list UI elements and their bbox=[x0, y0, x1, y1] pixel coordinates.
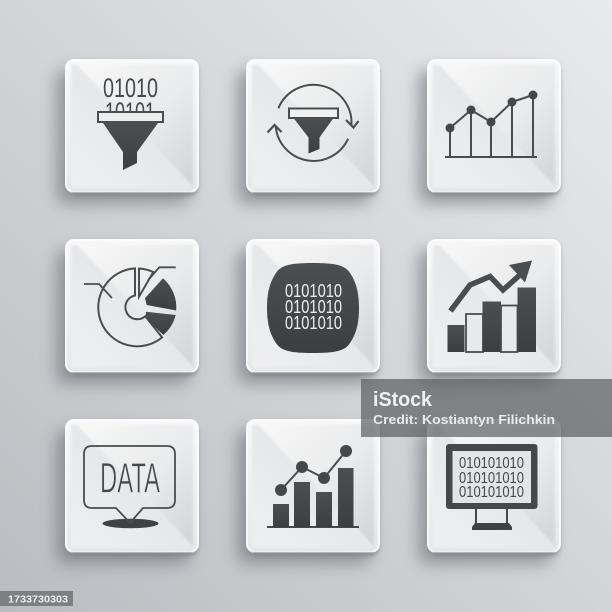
image id tag: 1733730303 bbox=[8, 594, 68, 606]
icon: monitor with binary bbox=[446, 444, 538, 530]
panel: bars and line bbox=[237, 419, 380, 564]
icon: bar chart with trend dots bbox=[267, 445, 359, 527]
icon: dark squircle with binary: 0101010 bbox=[285, 296, 342, 317]
icon: line chart with stems bbox=[445, 90, 538, 157]
icon: dark squircle with binary: 0101010 bbox=[285, 280, 342, 301]
iStock logo text: iStock bbox=[373, 388, 433, 411]
icon: pie chart bbox=[84, 267, 176, 346]
watermark banner bbox=[361, 379, 612, 437]
panel: funnel refresh bbox=[237, 59, 380, 204]
icon: bar chart with rising arrow bbox=[448, 260, 536, 352]
icon: dark squircle with binary bbox=[267, 263, 359, 353]
panel: binary squircle bbox=[237, 239, 380, 384]
credit text: Credit: Kostiantyn Filichkin bbox=[373, 413, 555, 427]
panel: binary funnel bbox=[56, 59, 199, 204]
panel: growth bars bbox=[418, 239, 561, 384]
panel: data pin bbox=[56, 419, 199, 564]
icon: funnel filtering binary: 10101 bbox=[105, 97, 155, 127]
icon: monitor with binary: 010101010 bbox=[459, 455, 524, 472]
panel: binary monitor bbox=[418, 419, 561, 564]
word DATA: DATA bbox=[100, 454, 160, 502]
icon: funnel filtering binary bbox=[98, 73, 163, 170]
icon: monitor with binary: 010101010 bbox=[459, 470, 524, 487]
icon: monitor with binary: 010101010 bbox=[459, 484, 524, 501]
panel: line chart bbox=[418, 59, 561, 204]
panel: pie chart bbox=[56, 239, 199, 384]
icon: funnel filtering binary: 01010 bbox=[103, 73, 158, 103]
image id tag bbox=[0, 591, 73, 606]
icon: data speech bubble pin bbox=[84, 446, 175, 528]
icon: funnel with cycle arrows bbox=[268, 85, 358, 161]
icon: dark squircle with binary: 0101010 bbox=[285, 312, 342, 333]
